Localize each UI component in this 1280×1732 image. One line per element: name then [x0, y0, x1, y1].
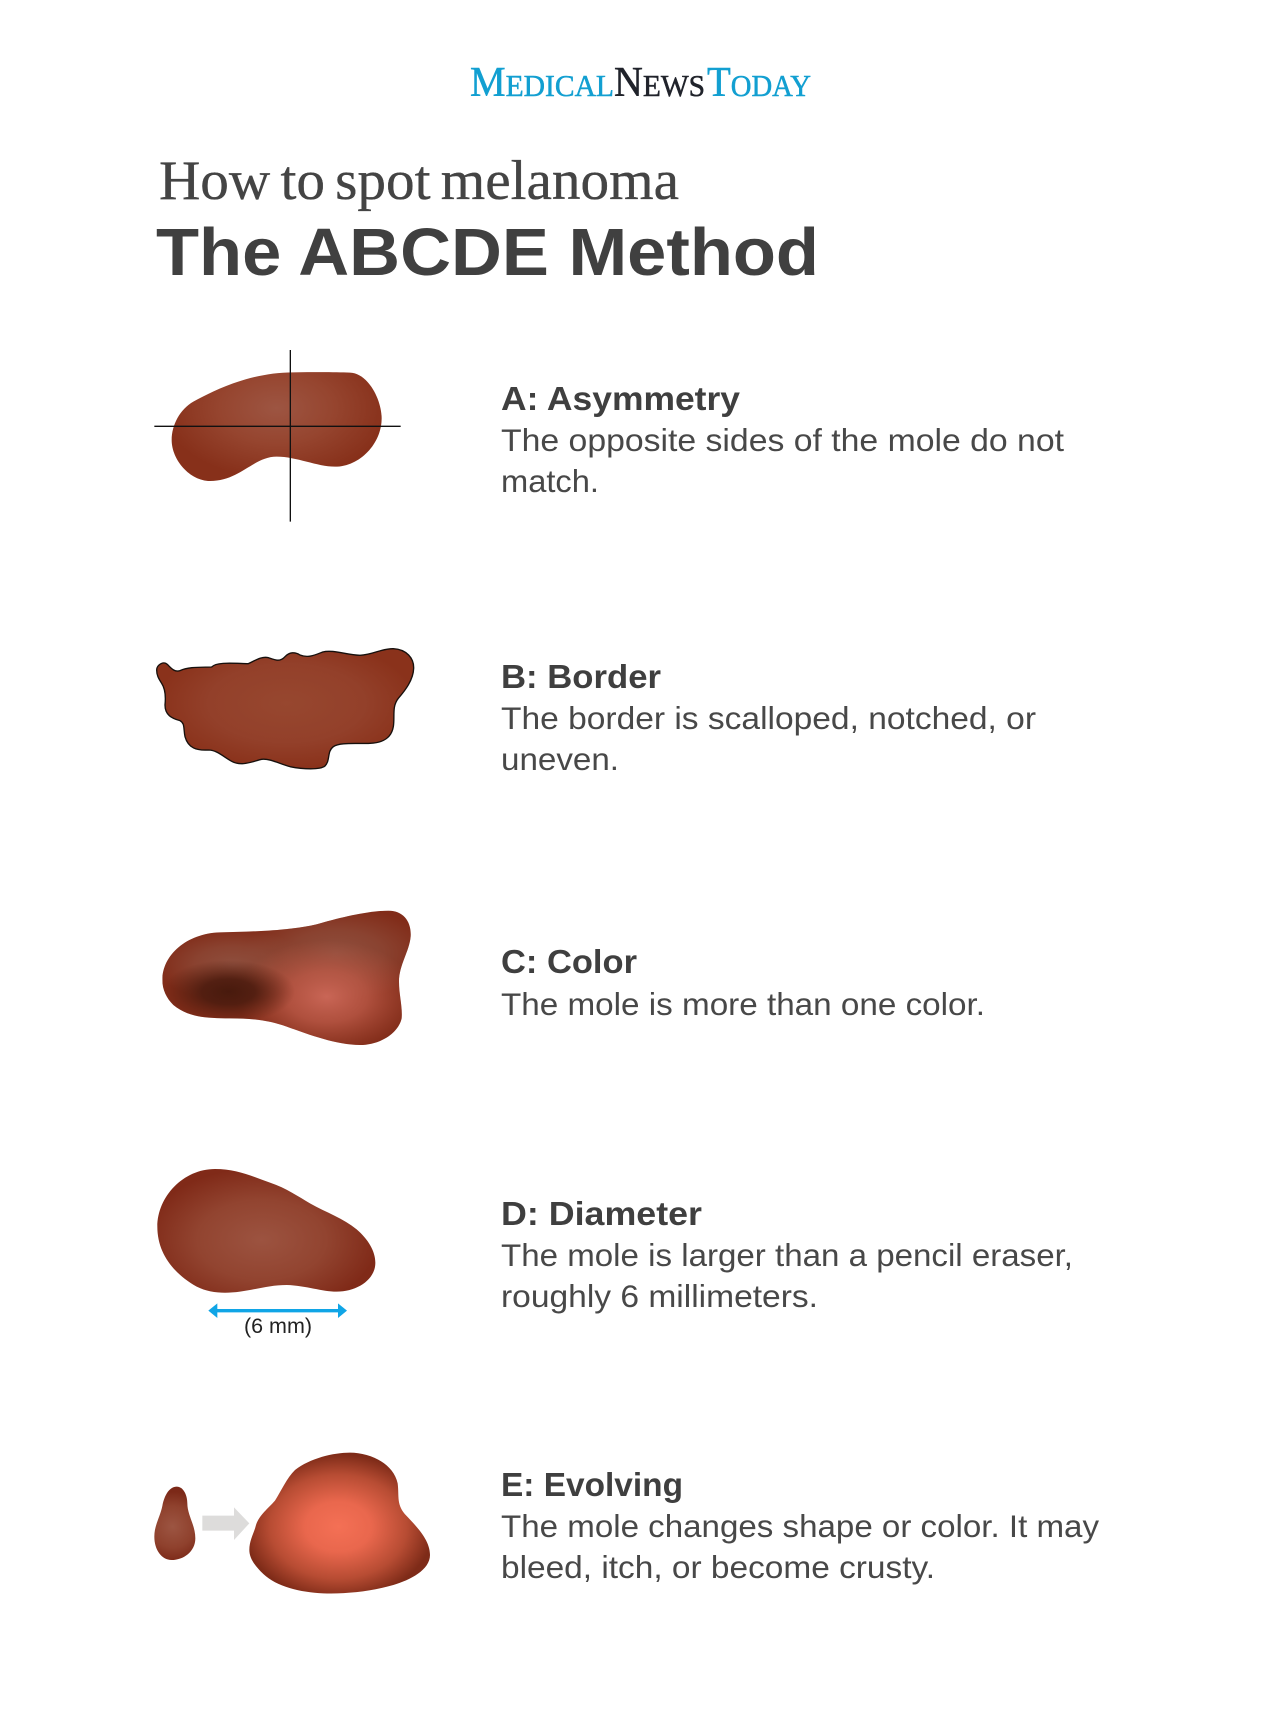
crosshair lines [154, 350, 401, 522]
logo: Medical News Today: TODAY [707, 60, 811, 106]
title: The ABCDE Method: The ABCDE Method [156, 215, 819, 290]
arrow: 6 mm width [208, 1303, 347, 1318]
mole D [157, 1169, 375, 1293]
text: A Asymmetry: The opposite sides of the mole do not [501, 422, 1064, 458]
text: B Border: B: Border [501, 658, 661, 695]
text: B Border [501, 658, 1036, 777]
mole B [157, 649, 414, 769]
text: B Border: uneven. [501, 741, 619, 777]
logo: Medical News Today: NEWS [614, 60, 705, 106]
panel: D diameter illustration [157, 1169, 375, 1318]
panel: C color illustration [162, 910, 411, 1045]
title: How to spot melanoma: How to spot melanoma [159, 150, 679, 212]
text: E Evolving: E: Evolving [501, 1466, 683, 1503]
panel: E evolving illustration [154, 1453, 430, 1593]
text: B Border: The border is scalloped, notched, or [501, 700, 1036, 736]
text: E Evolving: bleed, itch, or become crusty. [501, 1549, 935, 1585]
text: D Diameter [501, 1195, 1073, 1314]
text: D Diameter: roughly 6 millimeters. [501, 1278, 818, 1314]
arrow: grey growth arrow [202, 1507, 249, 1540]
mole C [162, 910, 411, 1045]
logo: Medical News Today: MEDICAL [470, 60, 614, 106]
mole A [172, 372, 382, 481]
text: D Diameter: The mole is larger than a pencil eraser, [501, 1237, 1073, 1273]
text: C Color: The mole is more than one color. [501, 986, 985, 1022]
text: E Evolving [501, 1466, 1099, 1585]
text: A Asymmetry: match. [501, 463, 599, 499]
text: D Diameter: D: Diameter [501, 1195, 702, 1232]
text: E Evolving: The mole changes shape or color. It may [501, 1508, 1099, 1544]
panel: B border illustration [157, 649, 414, 769]
label: 6 mm: (6 mm) [244, 1314, 312, 1338]
small mole [154, 1487, 195, 1560]
text: C Color [501, 943, 985, 1022]
text: A Asymmetry: A: Asymmetry [501, 380, 741, 417]
text: A Asymmetry [501, 380, 1064, 499]
logo: Medical News Today [470, 60, 811, 106]
text: C Color: C: Color [501, 943, 637, 980]
panel: A asymmetry illustration [154, 350, 401, 522]
large mole [249, 1453, 430, 1593]
